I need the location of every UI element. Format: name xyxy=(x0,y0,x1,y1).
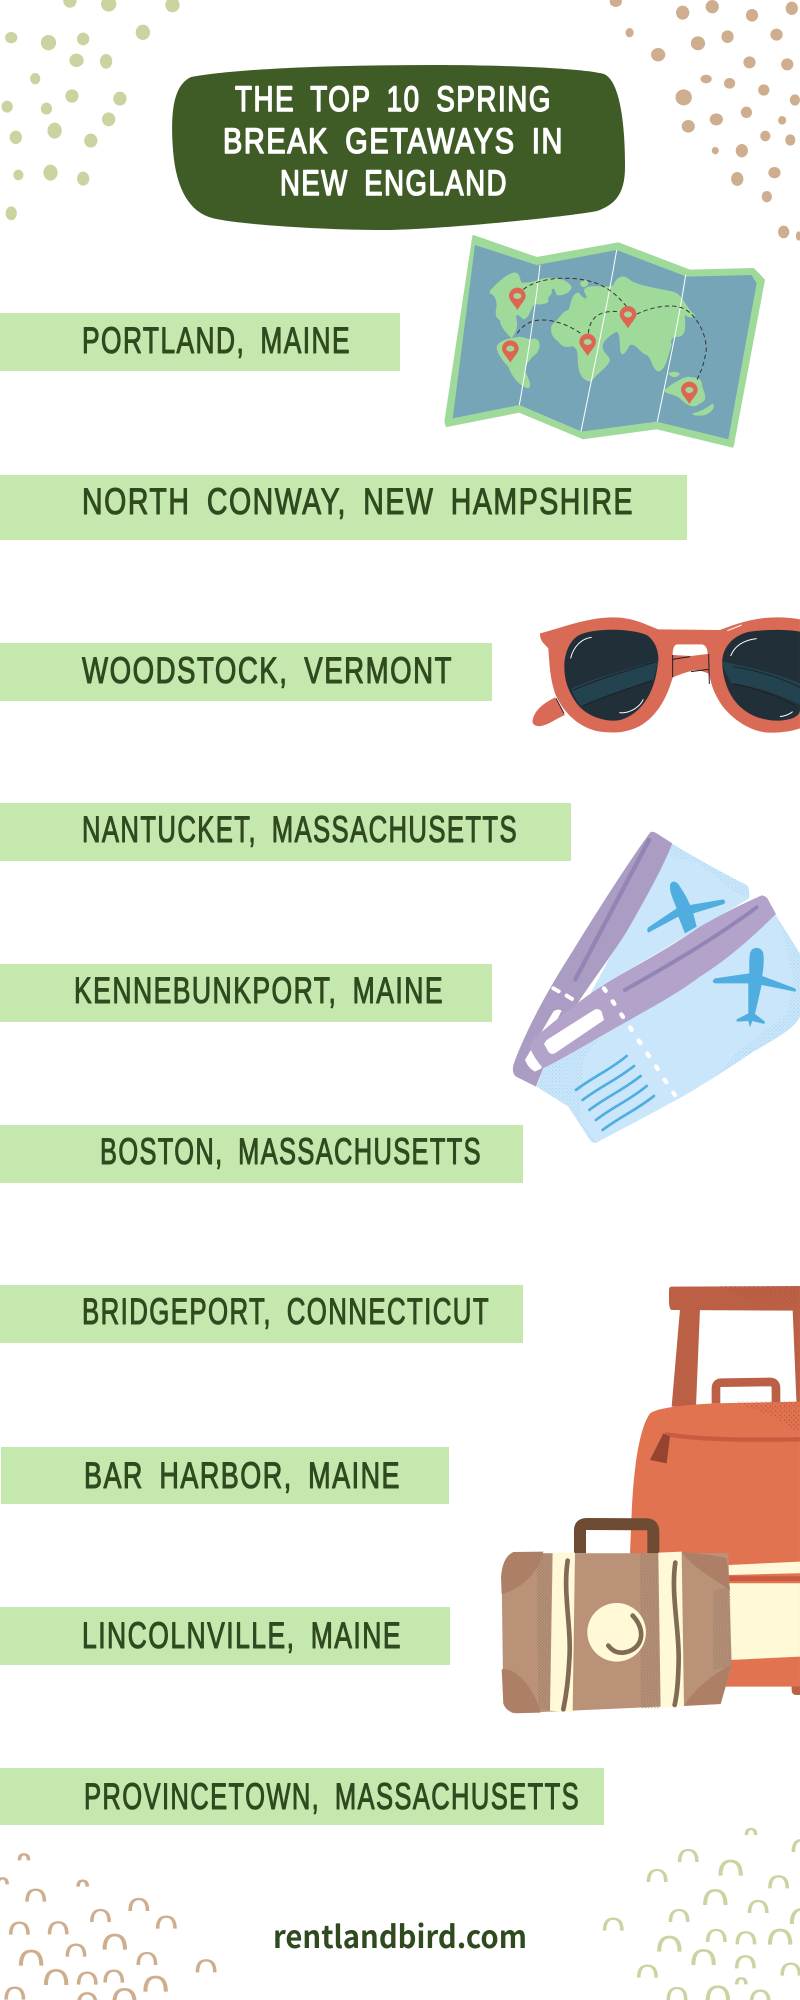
row 1: Portland xyxy=(0,313,400,371)
title banner: THE TOP 10 SPRING xyxy=(235,80,552,119)
row 5: Kennebunkport: KENNEBUNKPORT, MAINE xyxy=(74,970,444,1011)
illustration: boarding passes xyxy=(513,832,800,1143)
illustration: folded world map xyxy=(445,236,764,447)
title banner: NEW ENGLAND xyxy=(280,164,508,203)
title banner: BREAK GETAWAYS IN xyxy=(223,122,564,161)
row 8: Bar Harbor: BAR HARBOR, MAINE xyxy=(84,1455,401,1496)
row 4: Nantucket: NANTUCKET, MASSACHUSETTS xyxy=(82,809,518,850)
row 9: Lincolnville xyxy=(0,1607,450,1665)
illustration: sunglasses xyxy=(532,617,800,733)
row 1: Portland: PORTLAND, MAINE xyxy=(82,320,351,361)
row 6: Boston xyxy=(0,1125,523,1183)
row 8: Bar Harbor xyxy=(1,1447,449,1504)
footer website: rentlandbird.com xyxy=(273,1912,527,1957)
decoration: brown dots top right xyxy=(610,0,800,241)
row 9: Lincolnville: LINCOLNVILLE, MAINE xyxy=(82,1615,402,1656)
illustration: small brown suitcase xyxy=(501,1524,732,1713)
row 2: North Conway xyxy=(0,475,687,540)
row 7: Bridgeport: BRIDGEPORT, CONNECTICUT xyxy=(82,1291,490,1332)
row 10: Provincetown: PROVINCETOWN, MASSACHUSETTS xyxy=(84,1776,580,1817)
decoration: green arcs bottom right xyxy=(605,1829,800,2000)
row 3: Woodstock xyxy=(0,643,492,701)
row 4: Nantucket xyxy=(0,803,571,861)
row 3: Woodstock: WOODSTOCK, VERMONT xyxy=(82,650,453,691)
row 2: North Conway: NORTH CONWAY, NEW HAMPSHIRE xyxy=(82,481,634,522)
row 10: Provincetown xyxy=(0,1768,604,1825)
illustration: large orange suitcase xyxy=(630,1286,800,1695)
row 7: Bridgeport xyxy=(0,1285,523,1343)
decoration: brown arcs bottom left xyxy=(0,1854,215,2000)
row 5: Kennebunkport xyxy=(0,964,492,1022)
title banner xyxy=(172,65,625,230)
decoration: green dots top left xyxy=(2,0,180,220)
row 6: Boston: BOSTON, MASSACHUSETTS xyxy=(100,1131,482,1172)
